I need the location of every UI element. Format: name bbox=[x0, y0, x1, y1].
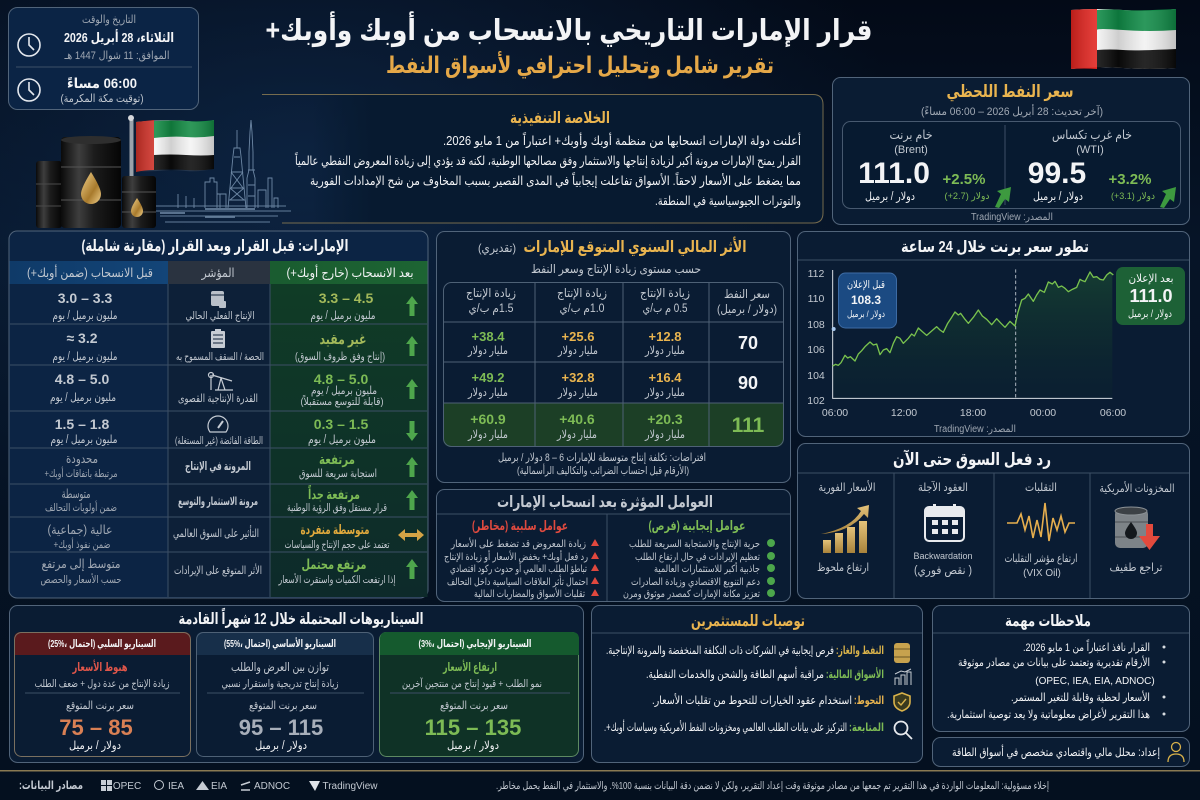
icon: clock 2 bbox=[18, 79, 40, 101]
panel: executive summary: والتوترات الجيوسياسية في المنطقة. bbox=[655, 194, 801, 209]
panel: executive summary: مما يضغط على الأسعار لاحقاً. الأسواق تفاعلت إيجابياً في المدى القصير بسبب المخاوف من شح الإمدادات الفورية bbox=[310, 171, 801, 189]
scenario card: positive: 115 – 135 bbox=[425, 715, 521, 740]
column: after withdrawal: 3.3 – 4.5 bbox=[319, 290, 373, 306]
illustration: barrels, flag and refinery bbox=[36, 115, 291, 228]
column: after withdrawal: مرتفعة جداً bbox=[308, 484, 360, 502]
panel: executive summary: أعلنت دولة الإمارات انسحابها من منظمة أوبك وأوبك+ اعتباراً من 1 مايو 2026. bbox=[443, 131, 801, 149]
column: after withdrawal: استجابة سريعة للسوق bbox=[299, 468, 377, 480]
column: before withdrawal: مليون برميل / يوم bbox=[52, 351, 118, 364]
scenario card: base: دولار / برميل bbox=[255, 740, 307, 753]
Brent price block: خام برنت bbox=[890, 128, 932, 143]
financial impact table: مليار دولار bbox=[557, 345, 598, 358]
scenario card: positive: نمو الطلب + قيود إنتاج من منتجين آخرين bbox=[402, 677, 542, 690]
positive factors: دعم التنويع الاقتصادي وزيادة الصادرات bbox=[631, 577, 760, 588]
market: futures: Backwardation bbox=[913, 551, 973, 561]
column: before withdrawal: 3.0 – 3.3 bbox=[58, 290, 112, 306]
scenario card: negative: 75 – 85 bbox=[59, 715, 133, 740]
title: قرار الإمارات التاريخي بالانسحاب من أوبك وأوبك+ bbox=[266, 11, 872, 47]
heading: important notes: ملاحظات مهمة bbox=[1005, 613, 1091, 630]
panel: investor recommendations: النفط والغاز: bbox=[836, 645, 884, 658]
panel: annual financial impact: حسب مستوى زيادة الإنتاج وسعر النفط bbox=[531, 262, 701, 277]
panel: influencing factors bbox=[436, 490, 790, 602]
heading: scenarios: السيناريوهات المحتملة خلال 12 شهراً القادمة bbox=[179, 608, 424, 628]
financial impact table: 70 bbox=[738, 333, 758, 353]
financial impact table: 90 bbox=[738, 373, 758, 393]
negative factors: زيادة المعروض قد تضغط على الأسعار bbox=[450, 537, 586, 550]
WTI price block: خام غرب تكساس bbox=[1052, 128, 1132, 143]
financial impact table: +38.4 bbox=[472, 329, 505, 344]
column: indicator: مرونة الاستثمار والتوسع bbox=[178, 496, 258, 509]
Brent price block bbox=[858, 128, 1011, 208]
column: before withdrawal: ضمن نفوذ أوبك+ bbox=[54, 537, 111, 551]
oil barrel small left bbox=[36, 161, 62, 228]
panel: scenarios bbox=[10, 606, 584, 762]
WTI price block bbox=[1028, 128, 1176, 208]
trend arrows bbox=[398, 296, 424, 579]
date and time panel: 06:00 مساءً bbox=[67, 75, 137, 91]
scenario card: positive: دولار / برميل bbox=[447, 740, 499, 753]
panel: live oil price: (آخر تحديث: 28 أبريل 2026 – 06:00 مساءً) bbox=[921, 104, 1103, 118]
column: indicator: الأثر المتوقع على الإيرادات bbox=[174, 563, 262, 577]
icon: gauge bbox=[208, 416, 228, 432]
panel: investor recommendations: التحوط: bbox=[854, 695, 884, 708]
column: before withdrawal: ≈ 3.2 bbox=[66, 330, 98, 346]
panel: annual financial impact: (تقديري) bbox=[478, 241, 516, 256]
icon: pumpjack bbox=[208, 372, 233, 390]
line chart: 112 bbox=[808, 268, 825, 280]
refinery skyline bbox=[156, 120, 291, 222]
scenario card: negative bbox=[14, 632, 191, 756]
financial impact table: 0.5 م ب/ي bbox=[642, 303, 688, 315]
line chart: 06:00 bbox=[1100, 407, 1126, 419]
panel: comparison table: قبل الانسحاب (ضمن أوبك+) bbox=[27, 264, 153, 281]
callout: after announcement bbox=[1116, 267, 1185, 325]
date and time panel: الثلاثاء، 28 أبريل 2026 bbox=[64, 29, 174, 45]
scenario card: negative: هبوط الأسعار bbox=[72, 659, 128, 675]
column: after withdrawal: 4.8 – 5.0 bbox=[314, 371, 368, 387]
panel: annual financial impact bbox=[436, 232, 790, 482]
footer: data sources: ADNOC bbox=[254, 781, 290, 792]
column: indicator: الإنتاج الفعلي الحالي bbox=[186, 310, 254, 322]
line chart: 18:00 bbox=[960, 407, 986, 419]
icon: TradingView bbox=[309, 781, 320, 791]
table column backgrounds bbox=[10, 261, 428, 597]
market: volatility: (VIX Oil) bbox=[1023, 568, 1061, 579]
negative factors: احتمال تأثر العلاقات السياسية داخل التحالف bbox=[447, 574, 588, 588]
column: indicator: الطاقة الفائضة (غير المستغلة) bbox=[175, 435, 263, 447]
market: spot prices bbox=[817, 480, 876, 575]
scenario card: base: سعر برنت المتوقع bbox=[249, 700, 317, 712]
column: after withdrawal: إذا ارتفعت الكميات واستقرت الأسعار bbox=[278, 573, 396, 586]
column: indicator bbox=[173, 291, 264, 577]
icon: EIA bbox=[196, 781, 209, 790]
financial impact table: +16.4 bbox=[649, 370, 682, 385]
oil barrel large bbox=[61, 136, 121, 228]
panel: market reaction bbox=[798, 444, 1190, 598]
scenario card: positive: ارتفاع الأسعار bbox=[442, 659, 497, 674]
scenario card: positive: سعر برنت المتوقع bbox=[440, 700, 508, 712]
panel: investor recommendations: مراقبة أسهم الطاقة والشحن والخدمات النفطية. bbox=[646, 666, 824, 682]
Brent price block: (Brent) bbox=[894, 144, 928, 156]
financial impact table: مليار دولار bbox=[467, 429, 508, 442]
financial impact table: زيادة الإنتاج bbox=[466, 286, 516, 301]
scenario card: negative: دولار / برميل bbox=[69, 740, 121, 753]
callout: after announcement: دولار / برميل bbox=[1128, 308, 1172, 320]
positive factors: حرية الإنتاج والاستجابة السريعة للطلب bbox=[629, 539, 760, 550]
icon: barrel with down arrow bbox=[1115, 507, 1160, 550]
column: before withdrawal: عالية (جماعية) bbox=[48, 523, 112, 537]
column: after withdrawal: مرتفعة bbox=[319, 452, 355, 467]
panel: important notes: القرار نافذ اعتباراً من 1 مايو 2026. bbox=[1023, 639, 1150, 654]
financial impact table: +60.9 bbox=[470, 411, 506, 427]
positive factors: عوامل إيجابية (فرص) bbox=[648, 518, 746, 533]
date and time panel: التاريخ والوقت bbox=[82, 14, 136, 26]
negative factors bbox=[444, 518, 599, 600]
column: before withdrawal: مليون برميل / يوم bbox=[52, 310, 118, 323]
heading: influencing factors: العوامل المؤثرة بعد انسحاب الإمارات bbox=[497, 494, 713, 511]
panel: important notes: هذا التقرير لأغراض معلوماتية ولا يعد توصية استثمارية. bbox=[947, 707, 1150, 721]
flag: top right bbox=[1071, 9, 1176, 69]
column: indicator: المرونة في الإنتاج bbox=[185, 459, 251, 474]
footer: data sources: مصادر البيانات: bbox=[19, 780, 83, 792]
Brent price block: دولار (‎+2.7) bbox=[944, 191, 990, 202]
icon: OPEC bbox=[101, 780, 112, 791]
column: before withdrawal: متوسط إلى مرتفع bbox=[42, 557, 120, 572]
financial impact table: مليار دولار bbox=[556, 429, 597, 442]
market: futures: ( نقص فوري) bbox=[914, 565, 972, 578]
icon: finance chart bbox=[895, 669, 911, 685]
icon: calendar bbox=[925, 504, 964, 541]
column: after withdrawal: مليون برميل / يوم bbox=[308, 434, 376, 447]
market: US inventories: المخزونات الأمريكية bbox=[1100, 481, 1174, 496]
date and time panel bbox=[8, 8, 198, 110]
column: after withdrawal: مرتفع محتمل bbox=[302, 557, 366, 572]
negative factors: عوامل سلبية (مخاطر) bbox=[472, 518, 568, 533]
panel: comparison table: المؤشر bbox=[201, 266, 234, 281]
icon: rising bars bbox=[821, 505, 869, 553]
icon: barrel bbox=[211, 291, 226, 308]
column: indicator: القدرة الإنتاجية القصوى bbox=[178, 393, 258, 405]
panel: 24-hour brent chart bbox=[798, 232, 1190, 436]
heading: investor recommendations: توصيات للمستثمرين bbox=[691, 613, 805, 630]
negative factors: تقلبات الأسواق والمضاربات المالية bbox=[474, 587, 585, 600]
scenario card: positive bbox=[380, 632, 579, 756]
icon: shield bbox=[894, 693, 910, 711]
column: after withdrawal: مليون برميل / يوم bbox=[310, 310, 376, 323]
financial impact table: +49.2 bbox=[472, 370, 504, 385]
financial impact table: (دولار / برميل) bbox=[717, 302, 777, 317]
financial impact table bbox=[443, 282, 784, 447]
line chart: 102 bbox=[807, 395, 825, 407]
panel: important notes: (OPEC, IEA, EIA, ADNOC) bbox=[1035, 676, 1155, 687]
assumptions note: افتراضات: تكلفة إنتاج متوسطة للإمارات 6 – 8 دولار / برميل bbox=[498, 452, 706, 464]
financial impact table: مليار دولار bbox=[644, 345, 685, 358]
line chart: 106 bbox=[807, 344, 825, 356]
icon: volatility wave bbox=[1007, 503, 1075, 541]
line chart: 110 bbox=[808, 293, 825, 305]
financial impact table: +12.8 bbox=[649, 329, 681, 344]
assumptions note bbox=[498, 452, 706, 477]
column: after withdrawal: قرار مستقل وفق الرؤية الوطنية bbox=[287, 502, 387, 514]
column: before withdrawal: مليون برميل / يوم bbox=[50, 392, 116, 405]
financial impact table: مليار دولار bbox=[557, 387, 598, 400]
panel: investor recommendations: فرص إيجابية في الشركات ذات التكلفة المنخفضة والمرونة الإنتاجية. bbox=[606, 645, 834, 658]
panel: live oil price: المصدر: TradingView bbox=[971, 212, 1053, 223]
column: before withdrawal: 1.5 – 1.8 bbox=[55, 416, 109, 432]
market: volatility: التقلبات bbox=[1025, 482, 1057, 494]
panel: comparison table bbox=[9, 231, 428, 598]
oil barrel small right bbox=[122, 176, 156, 228]
footer: data sources: EIA bbox=[211, 781, 227, 792]
market: futures: العقود الآجلة bbox=[918, 480, 968, 495]
panel: executive summary: القرار يمنح الإمارات مرونة أكبر لزيادة إنتاجها والاستثمار وفق مصالحها الوطنية، لكنه قد يؤدي إلى زيادة المعروض النفطي عالمياً bbox=[295, 151, 801, 169]
financial impact table: +20.3 bbox=[647, 411, 683, 427]
WTI price block: دولار (‎+3.1) bbox=[1111, 191, 1155, 202]
positive factors: تعظيم الإيرادات في حال ارتفاع الطلب bbox=[635, 552, 760, 563]
column: before withdrawal: مليون برميل / يوم bbox=[50, 434, 118, 447]
callout: before announcement: دولار / برميل bbox=[847, 309, 885, 320]
panel: author bbox=[932, 738, 1190, 766]
column: before withdrawal: 4.8 – 5.0 bbox=[55, 371, 109, 387]
icon: magnifier bbox=[894, 722, 912, 739]
date and time panel: (توقيت مكة المكرمة) bbox=[60, 93, 144, 105]
line chart: 108 bbox=[807, 319, 825, 331]
scenario card: negative: زيادة الإنتاج من عدة دول + ضعف الطلب bbox=[34, 678, 170, 690]
column: after withdrawal: غير مقيد bbox=[320, 332, 366, 348]
financial impact table: مليار دولار bbox=[644, 387, 685, 400]
callout: after announcement: بعد الإعلان bbox=[1128, 273, 1174, 285]
line chart: 00:00 bbox=[1030, 407, 1056, 419]
financial impact table: +32.8 bbox=[562, 370, 594, 385]
scenario card: base: توازن بين العرض والطلب bbox=[231, 660, 329, 675]
market: US inventories: تراجع طفيف bbox=[1110, 562, 1162, 575]
icon: analyst bbox=[1168, 742, 1184, 762]
Brent price block: +2.5% bbox=[943, 171, 985, 188]
panel: important notes: الأسعار لحظية وقابلة للتغير المستمر. bbox=[1011, 690, 1150, 704]
heading: live oil price: سعر النفط اللحظي bbox=[946, 82, 1074, 102]
scenario card: base: زيادة إنتاج تدريجية واستقرار نسبي bbox=[222, 678, 338, 690]
panel: 24-hour brent chart: المصدر: TradingView bbox=[934, 424, 1016, 435]
heading: comparison table: الإمارات: قبل القرار وبعد القرار (مقارنة شاملة) bbox=[82, 238, 348, 255]
market: spot prices: الأسعار الفورية bbox=[818, 480, 876, 495]
financial impact table: مليار دولار bbox=[467, 387, 508, 400]
financial impact table: مليار دولار bbox=[467, 345, 508, 358]
scenario card: negative: سعر برنت المتوقع bbox=[66, 700, 134, 712]
market: volatility bbox=[1004, 482, 1078, 579]
column: before withdrawal: متوسطة bbox=[62, 487, 90, 502]
negative factors: تباطؤ الطلب العالمي أو حدوث ركود اقتصادي bbox=[450, 562, 587, 575]
line chart: 12:00 bbox=[891, 407, 917, 419]
WTI price block: دولار / برميل bbox=[1033, 191, 1083, 204]
footer: data sources: TradingView bbox=[322, 781, 378, 792]
WTI price block: +3.2% bbox=[1109, 171, 1151, 188]
heading: executive summary: الخلاصة التنفيذية bbox=[510, 110, 610, 127]
panel: investor recommendations bbox=[592, 606, 922, 762]
financial impact table: +25.6 bbox=[562, 329, 594, 344]
subtitle: تقرير شامل وتحليل احترافي لأسواق النفط bbox=[386, 50, 774, 79]
Brent price block: 111.0 bbox=[858, 157, 930, 190]
negative factors: رد فعل أوبك+ بخفض الأسعار أو زيادة الإنتاج bbox=[444, 550, 588, 563]
column: before withdrawal: حسب الأسعار والحصص bbox=[40, 573, 122, 586]
assumptions note: (الأرقام قبل احتساب الضرائب والتكاليف الرأسمالية) bbox=[517, 463, 689, 477]
icon: IEA bbox=[154, 780, 164, 790]
Brent price block: دولار / برميل bbox=[865, 191, 915, 204]
footer: data sources: OPEC bbox=[113, 781, 141, 792]
icon: clipboard bbox=[211, 329, 225, 348]
financial impact table: سعر النفط bbox=[724, 287, 770, 302]
flag: small bbox=[136, 120, 214, 172]
icon: ADNOC bbox=[241, 782, 250, 790]
footer: data sources: IEA bbox=[168, 781, 184, 792]
callout: before announcement: قبل الإعلان bbox=[847, 279, 885, 291]
column: before withdrawal: مرتبطة باتفاقات أوبك+ bbox=[44, 466, 118, 480]
flag pole bbox=[128, 115, 134, 178]
panel: comparison table: بعد الانسحاب (خارج أوبك+) bbox=[286, 264, 414, 281]
column: before withdrawal: محدودة bbox=[66, 452, 98, 467]
financial impact table: زيادة الإنتاج bbox=[640, 286, 690, 301]
scenario card: positive: السيناريو الإيجابي (احتمال ،%3) bbox=[418, 638, 532, 650]
icon: oil barrel bbox=[894, 643, 910, 663]
footer line bbox=[0, 770, 1200, 772]
column: before withdrawal bbox=[40, 290, 122, 586]
line chart: 104 bbox=[807, 370, 825, 382]
financial impact table: زيادة الإنتاج bbox=[557, 286, 607, 301]
market: futures bbox=[913, 480, 973, 578]
panel: investor recommendations: الأسواق المالية: bbox=[826, 667, 884, 682]
panel: investor recommendations: المتابعة: bbox=[849, 722, 884, 734]
panel: investor recommendations: التركيز على بيانات الطلب العالمي ومخزونات النفط الأمريكية وسياسات أوبك+. bbox=[604, 719, 847, 735]
callout: after announcement: 111.0 bbox=[1129, 286, 1173, 306]
column: after withdrawal: (إنتاج وفق ظروف السوق) bbox=[295, 351, 385, 364]
column: after withdrawal: 0.3 – 1.5 bbox=[314, 416, 368, 432]
market: US inventories bbox=[1100, 481, 1174, 575]
WTI price block: 99.5 bbox=[1028, 157, 1086, 190]
heading: market reaction: رد فعل السوق حتى الآن bbox=[893, 449, 1051, 470]
financial impact table: +40.6 bbox=[559, 411, 595, 427]
heading: annual financial impact: الأثر المالي السنوي المتوقع للإمارات bbox=[524, 237, 746, 257]
icon: clock bbox=[18, 34, 40, 56]
column: indicator: التأثير على السوق العالمي bbox=[173, 525, 259, 541]
positive factors: جاذبية أكبر للاستثمارات العالمية bbox=[654, 562, 760, 575]
line chart: 06:00 bbox=[822, 407, 848, 419]
panel: important notes: الأرقام تقديرية وتعتمد على بيانات من مصادر موثوقة bbox=[958, 655, 1150, 669]
column: after withdrawal bbox=[278, 290, 396, 586]
heading: 24-hour brent chart: تطور سعر برنت خلال 24 ساعة bbox=[901, 239, 1089, 256]
market: volatility: ارتفاع مؤشر التقلبات bbox=[1004, 553, 1078, 565]
market: spot prices: ارتفاع ملحوظ bbox=[817, 562, 869, 575]
scenario card: base: السيناريو الأساسي (احتمال ،%55) bbox=[224, 637, 336, 650]
financial impact table: مليار دولار bbox=[644, 429, 685, 442]
panel: investor recommendations: استخدام عقود الخيارات للتحوط من تقلبات الأسعار. bbox=[652, 693, 852, 708]
WTI price block: (WTI) bbox=[1076, 144, 1104, 156]
financial impact table: 111 bbox=[732, 414, 765, 437]
line chart bbox=[807, 268, 1126, 419]
panel: executive summary bbox=[262, 94, 823, 223]
scenario card: base bbox=[196, 632, 374, 756]
column: after withdrawal: تعتمد على حجم الإنتاج والسياسات bbox=[284, 539, 390, 551]
positive factors bbox=[623, 518, 775, 600]
panel: live oil price bbox=[832, 78, 1190, 224]
positive factors: تعزيز مكانة الإمارات كمصدر موثوق ومرن bbox=[623, 589, 760, 600]
column: after withdrawal: (قابلة للتوسع مستقبلاً) bbox=[300, 394, 384, 408]
financial impact table: 1.5م ب/ي bbox=[468, 303, 514, 315]
scenario card: negative: السيناريو السلبي (احتمال ،%25) bbox=[48, 638, 156, 650]
column: before withdrawal: ضمن أولويات التحالف bbox=[45, 500, 117, 514]
column: after withdrawal: مليون برميل / يوم bbox=[311, 385, 377, 397]
footer: data sources bbox=[19, 780, 378, 792]
scenario card: base: 95 – 115 bbox=[239, 715, 323, 740]
financial impact table: 1.0م ب/ي bbox=[560, 303, 604, 315]
column: after withdrawal: متوسطة منفردة bbox=[300, 522, 370, 537]
panel: important notes bbox=[932, 606, 1190, 732]
callout: before announcement: 108.3 bbox=[851, 293, 881, 307]
footer: disclaimer: إخلاء مسؤولية: المعلومات الواردة في هذا التقرير تم جمعها من مصادر موثوقة وقت إعداد التقرير، ولكن لا نضمن دقة البيانات بنسبة 100%. والاستثمار في النفط يحمل مخاطر. bbox=[496, 780, 1049, 792]
column: indicator: الحصة / السقف المسموح به bbox=[176, 351, 264, 363]
date and time panel: الموافق: 11 شوال 1447 هـ bbox=[64, 50, 169, 63]
callout: before announcement bbox=[838, 273, 896, 328]
